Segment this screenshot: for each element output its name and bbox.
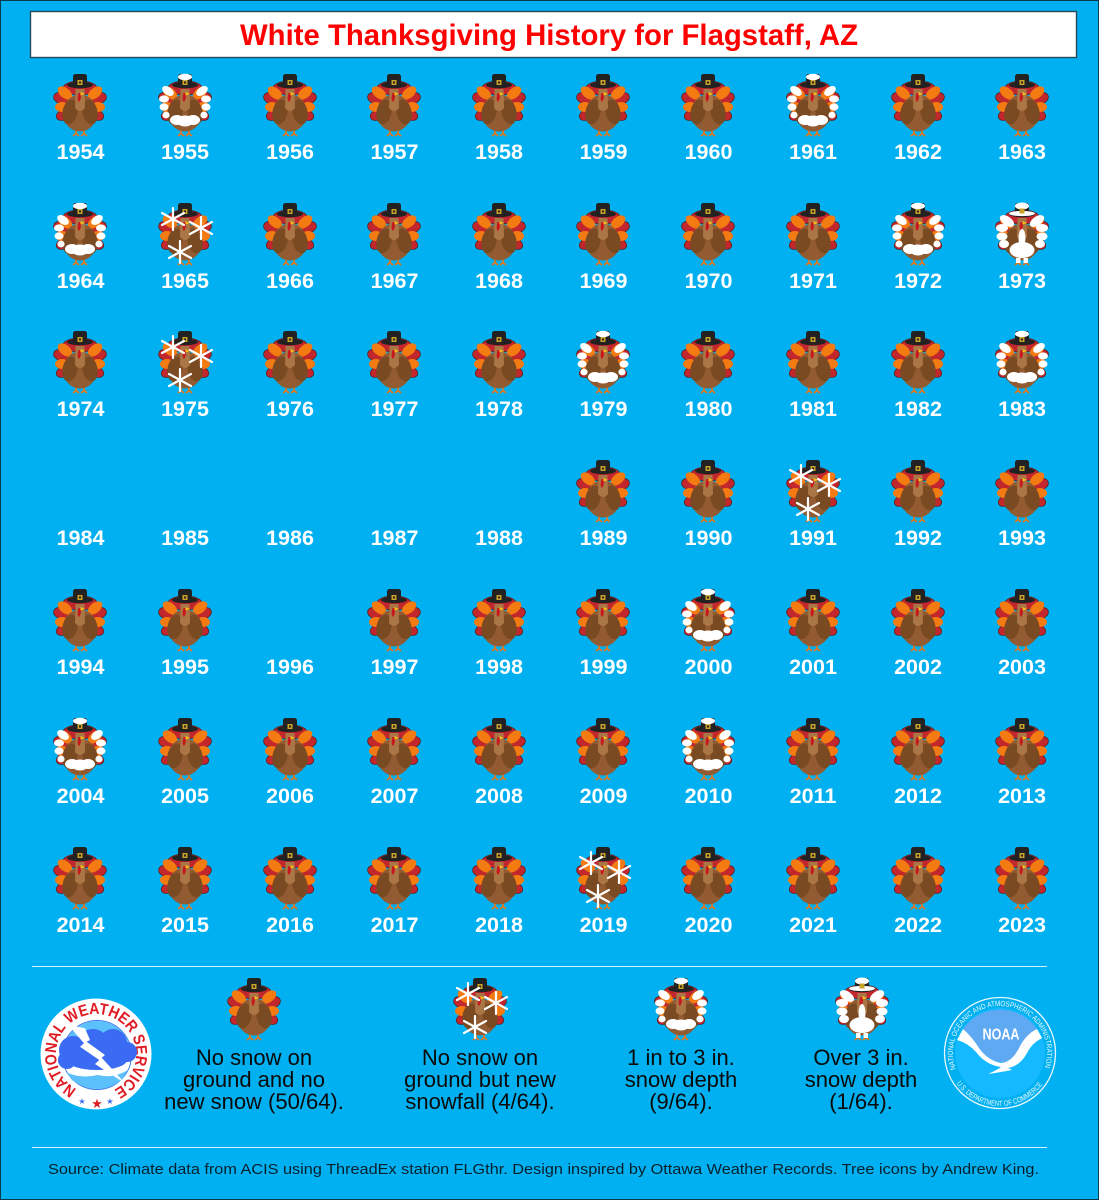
year 1999: 1999 xyxy=(580,655,627,679)
year 1962: 1962 xyxy=(894,140,942,164)
year 1959 xyxy=(575,74,631,164)
year 1980 xyxy=(680,331,736,421)
year 1957 xyxy=(366,74,422,164)
year 1991 xyxy=(785,460,841,550)
year 1981 xyxy=(785,331,841,421)
year 2020 xyxy=(680,847,736,937)
year 2016: 2016 xyxy=(266,913,314,937)
year 1978 xyxy=(471,331,527,421)
legend: no snow: new snow (50/64). xyxy=(164,1089,344,1114)
year 2011: 2011 xyxy=(790,784,836,808)
year 1977: 1977 xyxy=(371,397,418,421)
year 2010 xyxy=(680,718,736,808)
year 2006: 2006 xyxy=(266,784,314,808)
logo: National Weather Service: ★ xyxy=(78,1097,86,1106)
year 1954 xyxy=(52,74,108,164)
year 1995 xyxy=(157,589,213,679)
year 1992: 1992 xyxy=(894,526,942,550)
year 1961: 1961 xyxy=(789,140,837,164)
year 1988 (no data): 1988 xyxy=(475,526,523,550)
year 1985 (no data): 1985 xyxy=(161,526,209,550)
logo: National Weather Service: ★ xyxy=(106,1097,114,1106)
year 1972 xyxy=(890,203,946,293)
year 2011 xyxy=(785,718,841,808)
year 1983: 1983 xyxy=(998,397,1046,421)
year 2007: 2007 xyxy=(371,784,418,808)
year 2002: 2002 xyxy=(894,655,942,679)
year 2017: 2017 xyxy=(371,913,418,937)
year 1955: 1955 xyxy=(161,140,209,164)
year 1998: 1998 xyxy=(475,655,523,679)
year 2003 xyxy=(994,589,1050,679)
year 1972: 1972 xyxy=(894,269,942,293)
year 2022: 2022 xyxy=(894,913,942,937)
year 1957: 1957 xyxy=(371,140,418,164)
year 1997 xyxy=(366,589,422,679)
year 2012: 2012 xyxy=(894,784,942,808)
year 1991: 1991 xyxy=(789,526,837,550)
legend: new snowfall only: snowfall (4/64). xyxy=(405,1089,555,1114)
year 1994 xyxy=(52,589,108,679)
year 2018: 2018 xyxy=(475,913,523,937)
year 1971 xyxy=(785,203,841,293)
year 2013 xyxy=(994,718,1050,808)
year 1956: 1956 xyxy=(266,140,314,164)
year 1968 xyxy=(471,203,527,293)
logo: NOAA xyxy=(944,996,1056,1110)
year 1996 (no data): 1996 xyxy=(266,655,314,679)
year 1979: 1979 xyxy=(580,397,627,421)
year 1977 xyxy=(366,331,422,421)
year 2021: 2021 xyxy=(789,913,837,937)
year 1999 xyxy=(575,589,631,679)
year 1975: 1975 xyxy=(161,397,209,421)
year 1961 xyxy=(785,74,841,164)
year 1980: 1980 xyxy=(685,397,732,421)
year 2005 xyxy=(157,718,213,808)
year 1990: 1990 xyxy=(685,526,732,550)
logo: NOAA: U.S. DEPARTMENT OF COMMERCE xyxy=(957,1080,1042,1106)
year 1975 xyxy=(157,331,213,421)
year 1967: 1967 xyxy=(371,269,418,293)
year 2008 xyxy=(471,718,527,808)
year 2010: 2010 xyxy=(685,784,732,808)
year 2015: 2015 xyxy=(161,913,209,937)
year 1982: 1982 xyxy=(894,397,942,421)
year 1970 xyxy=(680,203,736,293)
legend: new snowfall only: No snow on xyxy=(422,1045,538,1070)
legend: new snowfall only: ground but new xyxy=(404,1067,556,1092)
year 1964: 1964 xyxy=(57,269,104,293)
year 1973 xyxy=(994,202,1050,293)
year 1981: 1981 xyxy=(789,397,837,421)
year 1954: 1954 xyxy=(57,140,104,164)
year 1960 xyxy=(680,74,736,164)
year 1955 xyxy=(157,74,213,164)
year 2018 xyxy=(471,847,527,937)
legend: 1 to 3 inches xyxy=(625,978,737,1114)
year 1966: 1966 xyxy=(266,269,314,293)
year 1986 (no data): 1986 xyxy=(266,526,314,550)
year 1971: 1971 xyxy=(789,269,837,293)
year 1994: 1994 xyxy=(57,655,104,679)
year 1974: 1974 xyxy=(57,397,104,421)
year 1993 xyxy=(994,460,1050,550)
year 1960: 1960 xyxy=(685,140,732,164)
year 1993: 1993 xyxy=(998,526,1046,550)
year 2000 xyxy=(680,589,736,679)
year 2005: 2005 xyxy=(161,784,209,808)
legend: no snow xyxy=(164,978,344,1114)
legend: over 3 inches: Over 3 in. xyxy=(813,1045,909,1070)
year 1989: 1989 xyxy=(580,526,627,550)
year 2014 xyxy=(52,847,108,937)
year 1969 xyxy=(575,203,631,293)
legend: no snow: ground and no xyxy=(183,1067,325,1092)
year 1995: 1995 xyxy=(161,655,209,679)
year 2001 xyxy=(785,589,841,679)
year 1967 xyxy=(366,203,422,293)
year 1963: 1963 xyxy=(998,140,1046,164)
year 1978: 1978 xyxy=(475,397,523,421)
year 1989 xyxy=(575,460,631,550)
year 1982 xyxy=(890,331,946,421)
year 1964 xyxy=(52,203,108,293)
year 2004: 2004 xyxy=(57,784,104,808)
year 1973: 1973 xyxy=(998,269,1046,293)
year 2017 xyxy=(366,847,422,937)
year 1979 xyxy=(575,331,631,421)
legend: new snowfall only xyxy=(404,978,556,1114)
year 2009 xyxy=(575,718,631,808)
year 1984 (no data): 1984 xyxy=(57,526,104,550)
year 2004 xyxy=(52,718,108,808)
year 1965: 1965 xyxy=(161,269,209,293)
year 1983 xyxy=(994,331,1050,421)
year 2000: 2000 xyxy=(685,655,732,679)
year 2019: 2019 xyxy=(580,913,627,937)
year 1992 xyxy=(890,460,946,550)
legend: over 3 inches xyxy=(805,978,917,1114)
year 1998 xyxy=(471,589,527,679)
year 2023: 2023 xyxy=(998,913,1046,937)
year 1963 xyxy=(994,74,1050,164)
legend: 1 to 3 inches: snow depth xyxy=(625,1067,737,1092)
logo: National Weather Service: NATIONAL WEATHER SERVICE xyxy=(45,1002,148,1099)
year 1966 xyxy=(262,203,318,293)
year 2008: 2008 xyxy=(475,784,523,808)
logo: National Weather Service: ★ xyxy=(91,1096,103,1111)
year 1962 xyxy=(890,74,946,164)
title: White Thanksgiving History for Flagstaff, AZ xyxy=(240,19,858,52)
logo: NOAA: NOAA xyxy=(982,1026,1020,1044)
logo: NOAA: NATIONAL OCEANIC AND ATMOSPHERIC ADMINISTRATION xyxy=(948,1000,1052,1070)
year 2022 xyxy=(890,847,946,937)
year 1970: 1970 xyxy=(685,269,732,293)
year 2014: 2014 xyxy=(57,913,104,937)
title xyxy=(30,12,1076,58)
year 1974 xyxy=(52,331,108,421)
year 2002 xyxy=(890,589,946,679)
year 2003: 2003 xyxy=(998,655,1046,679)
year 1976 xyxy=(262,331,318,421)
year 2016 xyxy=(262,847,318,937)
year 2012 xyxy=(890,718,946,808)
legend: 1 to 3 inches: (9/64). xyxy=(649,1089,713,1114)
year 2009: 2009 xyxy=(580,784,627,808)
year 1965 xyxy=(157,203,213,293)
year 2001: 2001 xyxy=(789,655,837,679)
year 1997: 1997 xyxy=(371,655,418,679)
year 1956 xyxy=(262,74,318,164)
year 1968: 1968 xyxy=(475,269,523,293)
year 2023 xyxy=(994,847,1050,937)
legend: over 3 inches: snow depth xyxy=(805,1067,917,1092)
year 1959: 1959 xyxy=(580,140,627,164)
year 2019 xyxy=(575,847,631,937)
year 2013: 2013 xyxy=(998,784,1046,808)
year 1976: 1976 xyxy=(266,397,314,421)
year 1958 xyxy=(471,74,527,164)
year 1990 xyxy=(680,460,736,550)
year 1969: 1969 xyxy=(580,269,627,293)
legend: no snow: No snow on xyxy=(196,1045,312,1070)
year 1987 (no data): 1987 xyxy=(371,526,418,550)
year 2006 xyxy=(262,718,318,808)
year 2020: 2020 xyxy=(685,913,732,937)
year 1958: 1958 xyxy=(475,140,523,164)
year 2021 xyxy=(785,847,841,937)
legend: over 3 inches: (1/64). xyxy=(829,1089,893,1114)
source note: Source: Climate data from ACIS using ThreadEx station FLGthr. Design inspired by Ottawa Weather Records. Tree icons by Andrew King. xyxy=(48,1161,1039,1178)
legend: 1 to 3 inches: 1 in to 3 in. xyxy=(627,1045,735,1070)
year 2007 xyxy=(366,718,422,808)
year 2015 xyxy=(157,847,213,937)
